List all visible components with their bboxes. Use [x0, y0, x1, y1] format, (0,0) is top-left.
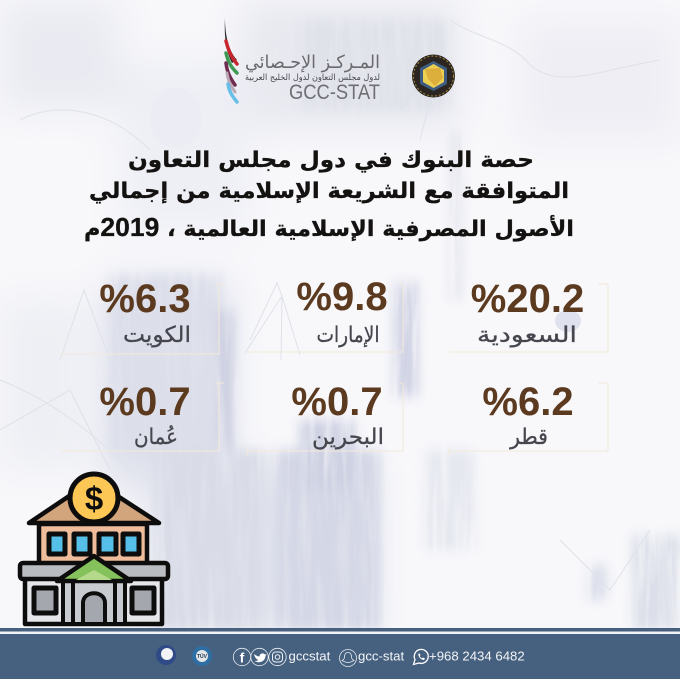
icon: TUV badge: [192, 646, 212, 666]
stat: Oman: عُمان: [134, 425, 178, 450]
stat: Oman: [99, 380, 191, 450]
stat: Oman: %0.7: [99, 380, 191, 424]
stat: Qatar: قطر: [509, 425, 548, 450]
text: gcc-stat: gcc-stat: [358, 648, 405, 664]
logo text: Arabic name: المـركـز الإحـصائي: [245, 52, 380, 73]
icon: whatsapp: [414, 649, 428, 664]
pediment: [57, 556, 131, 581]
stat: Bahrain: %0.7: [291, 380, 383, 424]
stat: Bahrain: [291, 380, 384, 450]
icon: facebook: f: [240, 650, 245, 666]
stat: UAE: الإمارات: [316, 323, 380, 348]
title line 3: الأصول المصرفية الإسلامية العالمية ، 2019م: [84, 212, 574, 242]
stat: Saudi Arabia: السعودية: [477, 323, 577, 348]
lower storey: [25, 578, 162, 624]
coin: [70, 474, 118, 522]
windows: [49, 534, 139, 554]
emblem: GCC seal: [412, 54, 455, 98]
stat: Kuwait: الكويت: [123, 323, 191, 348]
stat: Kuwait: [99, 277, 191, 348]
stat: Saudi Arabia: [471, 277, 584, 348]
icon: twitter: [251, 648, 268, 666]
footer bar: [0, 628, 680, 679]
columns and door: [63, 581, 125, 624]
stat: Bahrain: البحرين: [312, 425, 384, 450]
icon: snapchat: [340, 650, 356, 666]
stat: UAE: %9.8: [296, 275, 388, 319]
stat: Saudi Arabia: %20.2: [471, 277, 584, 321]
icon: facebook: [233, 648, 251, 666]
roof: [29, 480, 159, 523]
icon: partner badge: [156, 645, 176, 665]
text: phone number: +968 2434 6482: [429, 648, 525, 664]
icon: instagram: [269, 648, 286, 666]
logo text: Arabic subtitle: لدول مجلس التعاون لدول الخليج العربية: [245, 73, 380, 83]
logo text: GCC-STAT: GCC-STAT: [289, 81, 380, 104]
stat: Qatar: [482, 380, 574, 450]
logo: GCC-STAT: [225, 18, 380, 104]
title: [84, 148, 574, 242]
cornice: [20, 563, 168, 579]
side windows: [34, 588, 154, 613]
title line 1: حصة البنوك في دول مجلس التعاون: [128, 148, 534, 173]
card frames: [60, 284, 608, 456]
icon: ribbon mark: [225, 18, 237, 102]
stat: UAE: [296, 275, 388, 348]
upper storey: [39, 524, 147, 564]
stat: Qatar: %6.2: [482, 380, 574, 424]
icon: TUV badge: TÜV: [197, 653, 208, 660]
title line 2: المتوافقة مع الشريعة الإسلامية من إجمالي: [89, 179, 569, 204]
icon: bank building: [20, 474, 168, 624]
text: gccstat: gccstat: [288, 648, 331, 664]
dollar sign: $: [85, 480, 103, 517]
stat: Kuwait: %6.3: [99, 277, 191, 321]
